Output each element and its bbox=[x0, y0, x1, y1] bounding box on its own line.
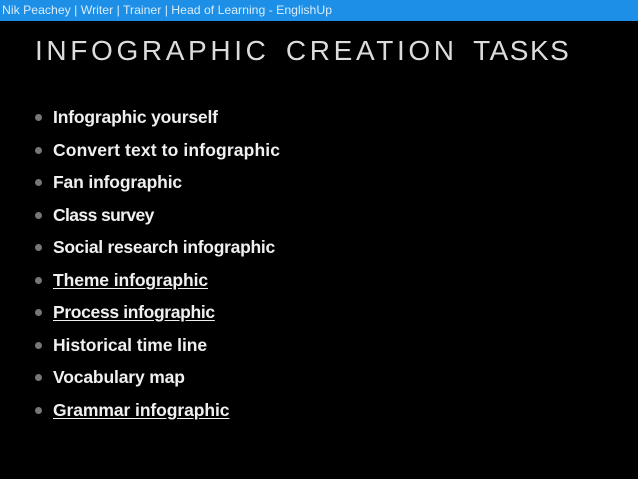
list item: Process infographic: Process infographic bbox=[53, 302, 215, 322]
bullet list bbox=[35, 107, 280, 420]
header bar: Nik Peachey | Writer | Trainer | Head of Learning - EnglishUp bbox=[2, 3, 332, 17]
list item: Class survey: Class survey bbox=[53, 205, 154, 225]
list item: Theme infographic: Theme infographic bbox=[53, 270, 208, 290]
title: INFOGRAPHIC CREATION TASKS bbox=[35, 35, 570, 66]
list item: Fan infographic: Fan infographic bbox=[53, 172, 182, 192]
list item: Grammar infographic: Grammar infographic bbox=[53, 400, 229, 420]
list item: Historical time line: Historical time line bbox=[53, 335, 207, 355]
header bar bbox=[0, 0, 638, 21]
list item: Social research infographic: Social research infographic bbox=[53, 237, 275, 257]
list item: Convert text to infographic: Convert text to infographic bbox=[53, 140, 280, 160]
list item: Vocabulary map: Vocabulary map bbox=[53, 367, 185, 387]
list item: Infographic yourself: Infographic yourself bbox=[53, 107, 218, 127]
